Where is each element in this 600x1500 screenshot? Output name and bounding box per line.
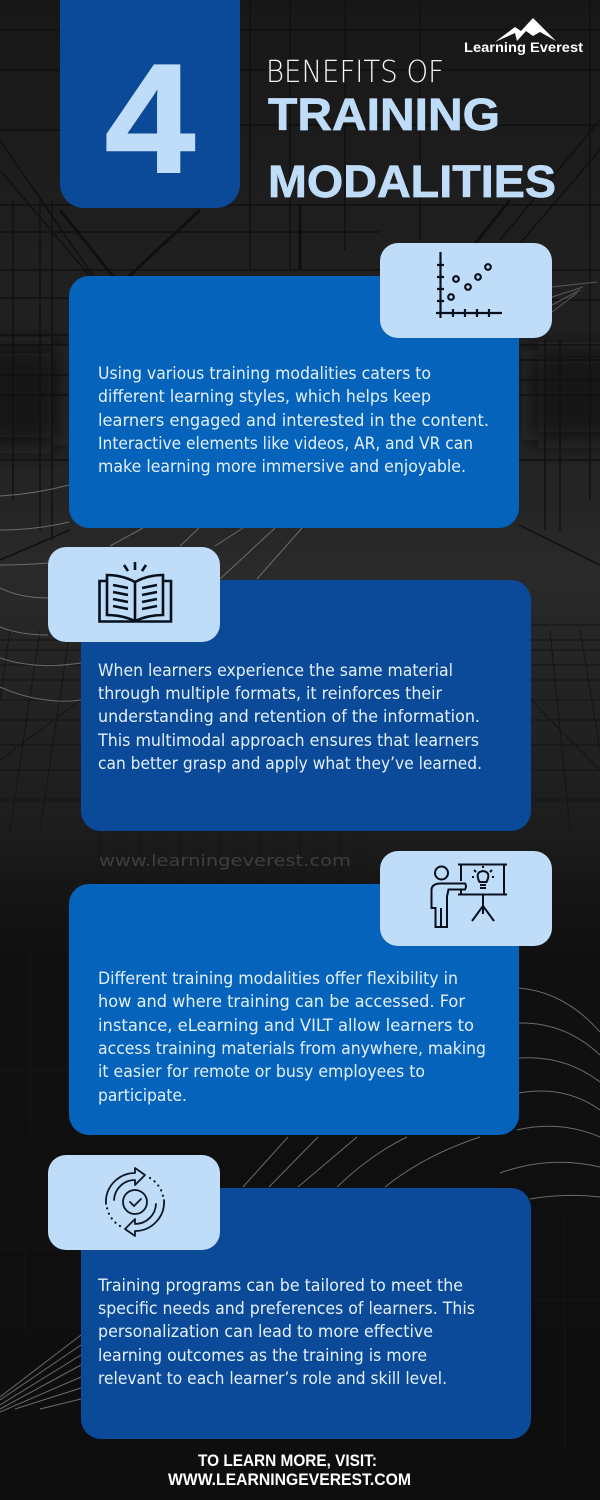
body text 3: instance, eLearning and VILT allow learners to — [98, 1016, 474, 1035]
title: BENEFITS OF — [266, 55, 444, 90]
body text 2: through multiple formats, it reinforces their — [98, 684, 442, 703]
icon card: cycle check — [48, 1155, 220, 1250]
icon card: scatter chart — [380, 243, 552, 338]
body text 3: how and where training can be accessed. For — [98, 992, 465, 1011]
background curves and lines — [0, 485, 600, 1412]
body text 3 — [98, 969, 486, 1105]
logo — [464, 18, 583, 55]
body text 4: personalization can lead to more effective — [98, 1322, 433, 1341]
icon: mountain — [495, 18, 556, 42]
body text 3: Different training modalities offer flexibility in — [98, 969, 458, 988]
icon card: open book — [48, 547, 220, 642]
panel: retention — [81, 580, 531, 831]
header number panel — [60, 0, 240, 208]
body text 2: When learners experience the same material — [98, 661, 453, 680]
title: TRAINING — [268, 89, 500, 140]
body text 1 — [98, 364, 489, 476]
big number 4: 4 — [105, 32, 195, 205]
logo: Learning Everest — [464, 39, 583, 55]
body text 4 — [97, 1276, 475, 1388]
body text 3: participate. — [98, 1086, 187, 1105]
panel: personalization — [81, 1188, 531, 1439]
body text 2 — [97, 661, 482, 773]
body text 1: learners engaged and interested in the content. — [98, 411, 489, 430]
title: MODALITIES — [268, 156, 556, 207]
icon card: presenter — [380, 851, 552, 946]
title — [266, 55, 556, 207]
body text 4: learning outcomes as the training is more — [98, 1346, 427, 1365]
body text 3: it easier for remote or busy employees to — [98, 1062, 425, 1081]
footer call to action — [168, 1451, 411, 1489]
body text 1: Interactive elements like videos, AR, and VR can — [98, 434, 473, 453]
footer call to action: WWW.LEARNINGEVEREST.COM — [168, 1470, 411, 1489]
panel: flexibility — [69, 884, 519, 1135]
dim areas — [0, 345, 600, 445]
body text 2: understanding and retention of the information. — [98, 707, 480, 726]
body text 4: Training programs can be tailored to meet the — [97, 1276, 463, 1295]
body text 4: specific needs and preferences of learners. This — [98, 1299, 475, 1318]
watermark: www.learningeverest.com — [99, 851, 351, 870]
body text 1: make learning more immersive and enjoyable. — [98, 457, 466, 476]
body text 1: different learning styles, which helps keep — [98, 387, 431, 406]
footer call to action: TO LEARN MORE, VISIT: — [198, 1451, 377, 1470]
body text 2: This multimodal approach ensures that learners — [97, 731, 479, 750]
panel: engagement — [69, 276, 519, 528]
body text 4: relevant to each learner’s role and skill level. — [98, 1369, 447, 1388]
body text 3: access training materials from anywhere, making — [98, 1039, 486, 1058]
body text 2: can better grasp and apply what they’ve learned. — [98, 754, 482, 773]
body text 1: Using various training modalities caters to — [98, 364, 431, 383]
